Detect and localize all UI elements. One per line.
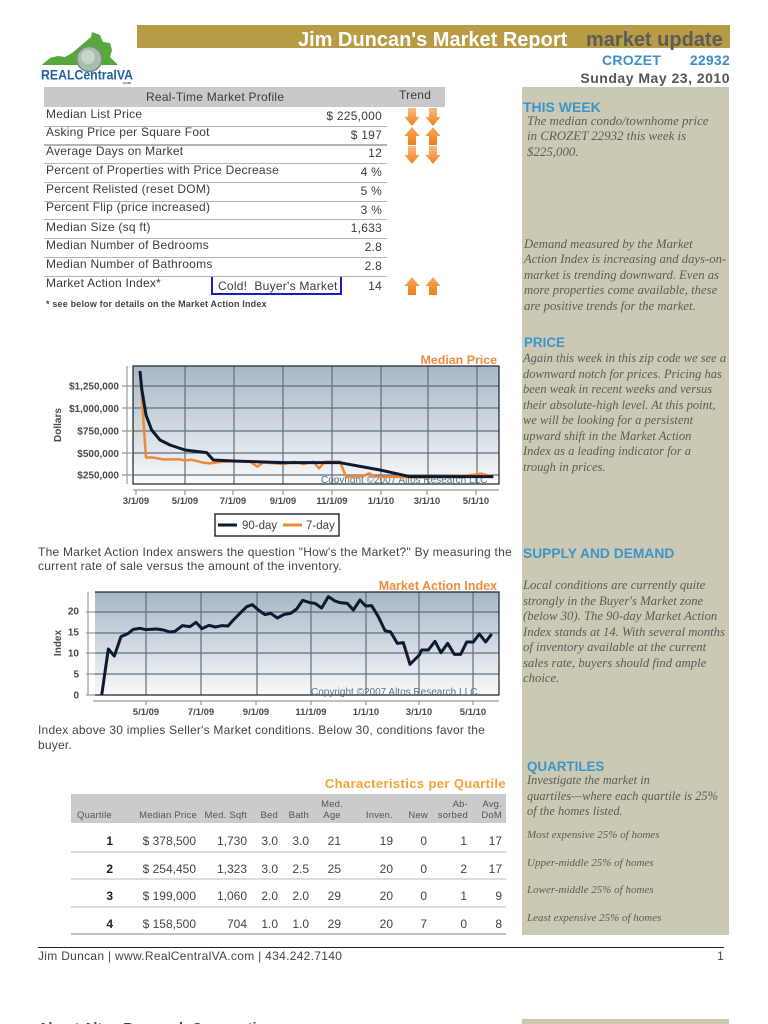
quartile row 1 bbox=[106, 834, 502, 848]
x axis: 3/1/10 bbox=[406, 707, 432, 718]
text: this week: in CROZET 22932 this week is bbox=[527, 129, 686, 143]
footer contact: Jim Duncan | www.RealCentralVA.com | 434.242.7140 bbox=[38, 949, 342, 963]
heading: characteristics per quartile: Characteristics per Quartile bbox=[325, 776, 506, 791]
text: price: upward shift in the Market Action bbox=[523, 429, 691, 443]
label: quartile 2: Upper-middle 25% of homes bbox=[527, 857, 654, 869]
quartile table header: Inven. bbox=[366, 810, 393, 821]
quartile row 2: 25 bbox=[328, 862, 341, 876]
text: price: been weak in recent weeks and versus bbox=[523, 382, 712, 396]
quartile row 1: 1 bbox=[106, 834, 113, 848]
chart title: Market Action Index bbox=[379, 579, 497, 593]
quartile row 1: 21 bbox=[328, 834, 341, 848]
quartile row 3: 0 bbox=[420, 889, 427, 903]
quartile row 4: 7 bbox=[420, 917, 427, 931]
quartile table header: DoM bbox=[481, 810, 502, 821]
text: supply and demand: sales rate, buyers should find ample bbox=[523, 656, 706, 670]
line: index bbox=[102, 597, 492, 695]
row: median list price: $ 225,000 bbox=[326, 109, 382, 123]
quartile row 4: 20 bbox=[380, 917, 393, 931]
status box: cold buyer's market: Cold! Buyer's Market bbox=[218, 279, 338, 293]
text: quartiles bbox=[527, 773, 718, 818]
quartile row 2: 3.0 bbox=[261, 862, 278, 876]
text: market action index intro bbox=[38, 545, 512, 573]
text: demand: are positive trends for the market. bbox=[524, 299, 696, 313]
y axis bbox=[53, 366, 133, 484]
text: quartiles: of the homes listed. bbox=[527, 804, 623, 818]
quartile row 3: 2.0 bbox=[261, 889, 278, 903]
row: median size: Median Size (sq ft) bbox=[46, 220, 151, 234]
quartile row 3: 29 bbox=[328, 889, 341, 903]
heading: supply and demand: SUPPLY AND DEMAND bbox=[523, 546, 674, 561]
row: days on market bbox=[46, 144, 382, 160]
x axis: 3/1/09 bbox=[123, 496, 149, 507]
text: supply and demand: (below 30). The 90-day Market Action bbox=[523, 609, 717, 623]
chart: market action index bbox=[53, 579, 500, 718]
arrows: days on market down bbox=[404, 146, 440, 164]
quartile row 2: 2 bbox=[460, 862, 467, 876]
row: bedrooms: Median Number of Bedrooms bbox=[46, 238, 209, 252]
quartile row 2: 17 bbox=[489, 862, 502, 876]
row: days on market: Average Days on Market bbox=[46, 144, 183, 158]
row: market action index: 14 bbox=[368, 279, 382, 293]
quartile row 4: 29 bbox=[328, 917, 341, 931]
logo: RealCentralVA: .com bbox=[122, 80, 132, 85]
quartile row 3: 1 bbox=[460, 889, 467, 903]
x axis: 5/1/10 bbox=[460, 707, 486, 718]
legend: 90-day bbox=[242, 520, 277, 532]
x axis: 7/1/09 bbox=[220, 496, 246, 507]
quartile row 3: 9 bbox=[495, 889, 502, 903]
x axis: 3/1/10 bbox=[414, 496, 440, 507]
quartile table header: Med. Sqft bbox=[205, 810, 247, 821]
y axis: Index bbox=[53, 630, 64, 656]
quartile row 4: 1.0 bbox=[292, 917, 309, 931]
y axis bbox=[53, 592, 95, 702]
text: index explanation bbox=[38, 723, 485, 752]
quartile row 3: $ 199,000 bbox=[143, 889, 196, 903]
quartile table header: Quartile bbox=[77, 810, 112, 821]
panel: quartile table bbox=[71, 794, 506, 935]
quartile row 1: 0 bbox=[420, 834, 427, 848]
text: price: we will be looking for a persistent bbox=[523, 413, 693, 427]
quartile row 2: 2 bbox=[106, 862, 113, 876]
quartile table header: New bbox=[408, 810, 428, 821]
text: index explanation: Index above 30 implies Seller's Market conditions. Below 30, conditions favor the bbox=[38, 723, 485, 737]
quartile row 4 bbox=[106, 917, 502, 931]
label: quartile 1: Most expensive 25% of homes bbox=[527, 829, 660, 841]
text: price bbox=[522, 351, 726, 474]
text: supply and demand bbox=[522, 578, 725, 685]
quartile table header: Bed bbox=[260, 810, 278, 821]
x axis bbox=[123, 490, 499, 507]
x axis bbox=[93, 701, 499, 718]
quartile row 1: 19 bbox=[380, 834, 393, 848]
row: relisted: Percent Relisted (reset DOM) bbox=[46, 182, 210, 196]
row: price decrease bbox=[46, 163, 382, 179]
quartile table header: sorbed bbox=[438, 810, 468, 821]
quartile row 1: 1 bbox=[460, 834, 467, 848]
chart title: Median Price bbox=[421, 353, 497, 367]
text: market action index intro: current rate of sale versus the amount of the inventory. bbox=[38, 559, 342, 573]
y axis: 0 bbox=[73, 690, 79, 702]
logo: RealCentralVA bbox=[41, 32, 133, 85]
y axis: $1,250,000 bbox=[69, 382, 119, 392]
title: Jim Duncan's Market Report bbox=[298, 29, 567, 51]
y axis: $750,000 bbox=[77, 426, 119, 438]
text: supply and demand: of inventory available at the current bbox=[523, 640, 706, 654]
quartile row 2: 0 bbox=[420, 862, 427, 876]
label: quartile 4: Least expensive 25% of homes bbox=[527, 912, 661, 924]
copyright note: Copyright ©2007 Altos Research LLC bbox=[321, 475, 487, 486]
panel: commentary sidebar bbox=[522, 87, 729, 935]
quartile row 4: $ 158,500 bbox=[143, 917, 196, 931]
row: median list price: Median List Price bbox=[46, 107, 142, 121]
text: price: trough in prices. bbox=[523, 460, 606, 474]
quartile row 3: 3 bbox=[106, 889, 113, 903]
x axis: 5/1/09 bbox=[172, 496, 198, 507]
row: flip: Percent Flip (price increased) bbox=[46, 200, 210, 214]
row: asking price: Asking Price per Square Foot bbox=[46, 125, 210, 139]
row: price decrease: Percent of Properties with Price Decrease bbox=[46, 163, 279, 177]
y axis: 20 bbox=[68, 606, 79, 618]
legend bbox=[215, 514, 339, 536]
x axis: 1/1/10 bbox=[353, 707, 379, 718]
heading: this week: THIS WEEK bbox=[523, 99, 601, 115]
text: supply and demand: Index stands at 14. With several months bbox=[523, 625, 725, 639]
quartile row 3 bbox=[106, 889, 502, 903]
quartile table header: Med. bbox=[321, 799, 343, 810]
row: flip: 3 % bbox=[361, 203, 382, 217]
x axis: 5/1/09 bbox=[133, 707, 159, 718]
next page sidebar bbox=[522, 1019, 729, 1024]
chart: median price bbox=[53, 353, 500, 537]
x axis: 11/1/09 bbox=[316, 496, 348, 507]
y axis: $1,000,000 bbox=[69, 404, 119, 415]
quartile row 2: $ 254,450 bbox=[143, 862, 196, 876]
y axis: 15 bbox=[68, 628, 79, 638]
quartile row 4: 704 bbox=[227, 917, 247, 931]
y axis: Dollars bbox=[53, 408, 64, 442]
quartile row 1: 3.0 bbox=[261, 834, 278, 848]
row: relisted: 5 % bbox=[361, 184, 382, 198]
quartile row 2: 2.5 bbox=[292, 862, 309, 876]
arrows: action index up bbox=[404, 277, 440, 295]
row: median size bbox=[46, 220, 382, 235]
table footnote: * see below for details on the Market Action Index bbox=[46, 299, 267, 309]
quartile row 4: 1.0 bbox=[261, 917, 278, 931]
text: demand: Action Index is increasing and days-on- bbox=[524, 252, 726, 266]
arrows: price per foot up bbox=[404, 127, 440, 145]
x axis: 5/1/10 bbox=[463, 496, 489, 507]
row: bathrooms bbox=[46, 257, 382, 273]
arrows: list price down bbox=[404, 108, 440, 126]
y axis: 10 bbox=[68, 648, 79, 660]
report date: Sunday May 23, 2010 bbox=[580, 70, 730, 86]
quartile row 1: 1,730 bbox=[217, 834, 247, 848]
text: this week: The median condo/townhome price bbox=[527, 114, 709, 128]
table header bbox=[44, 87, 445, 107]
row: asking price: $ 197 bbox=[351, 128, 382, 142]
text: demand: market is trending downward. Even as bbox=[524, 268, 719, 282]
location: Crozet 22932 bbox=[602, 52, 730, 68]
heading: quartiles: QUARTILES bbox=[527, 759, 604, 774]
quartile row 2 bbox=[106, 862, 502, 876]
x axis: 11/1/09 bbox=[295, 707, 327, 718]
y axis: $250,000 bbox=[77, 470, 119, 482]
quartile table header: Avg. bbox=[482, 799, 502, 810]
location: Crozet 22932: CROZET bbox=[602, 52, 661, 68]
line: 90-day bbox=[140, 371, 493, 477]
quartile row 3: 1,060 bbox=[217, 889, 247, 903]
y axis: $500,000 bbox=[77, 449, 119, 460]
copyright note: Copyright ©2007 Altos Research LLC bbox=[311, 687, 477, 698]
location: Crozet 22932: 22932 bbox=[690, 52, 730, 68]
x axis: 9/1/09 bbox=[243, 707, 269, 718]
text: quartiles: quartiles—where each quartile is 25% bbox=[527, 789, 718, 803]
text: quartiles: Investigate the market in bbox=[527, 773, 650, 787]
text: price: downward notch for prices. Pricing has bbox=[523, 367, 722, 381]
text: this week bbox=[527, 114, 709, 159]
text: demand bbox=[523, 236, 726, 313]
text: price: Again this week in this zip code we see a bbox=[523, 351, 726, 365]
text: supply and demand: choice. bbox=[523, 671, 559, 685]
x axis: 9/1/09 bbox=[270, 496, 296, 507]
x axis: 7/1/09 bbox=[188, 707, 214, 718]
row: market action index: Market Action Index* bbox=[46, 276, 161, 290]
page number: 1 bbox=[717, 949, 724, 963]
table header: Trend bbox=[399, 88, 431, 102]
quartile row 1: $ 378,500 bbox=[143, 834, 196, 848]
row: median size: 1,633 bbox=[351, 221, 382, 235]
quartile row 1: 3.0 bbox=[292, 834, 309, 848]
row: days on market: 12 bbox=[368, 146, 382, 160]
quartile table header: Age bbox=[323, 810, 341, 821]
row: bathrooms: Median Number of Bathrooms bbox=[46, 257, 213, 271]
text: price: their absolute-high level. At this point, bbox=[523, 398, 715, 412]
quartile row 4: 0 bbox=[460, 917, 467, 931]
plot area bbox=[133, 366, 499, 484]
subtitle: market update: market update bbox=[586, 29, 723, 51]
text: demand: more properties come available, these bbox=[524, 283, 717, 297]
title banner bbox=[137, 25, 730, 48]
x axis: 1/1/10 bbox=[368, 496, 394, 507]
y axis: 5 bbox=[73, 670, 79, 680]
row: market action index bbox=[46, 276, 382, 293]
quartile table header: Median Price bbox=[139, 810, 197, 821]
quartile row 2: 20 bbox=[380, 862, 393, 876]
quartile row 4: 4 bbox=[106, 917, 113, 931]
text: supply and demand: Local conditions are currently quite bbox=[523, 578, 705, 592]
row: bedrooms bbox=[46, 238, 382, 254]
quartile row 1: 17 bbox=[489, 834, 502, 848]
quartile row 3: 20 bbox=[380, 889, 393, 903]
text: this week: $225,000. bbox=[527, 145, 579, 159]
text: supply and demand: strongly in the Buyer's Market zone bbox=[523, 594, 703, 608]
row: flip bbox=[46, 200, 382, 217]
quartile table header: Bath bbox=[289, 810, 309, 821]
quartile row 3: 2.0 bbox=[292, 889, 309, 903]
table header: Real-Time Market Profile bbox=[146, 90, 284, 104]
footer bbox=[38, 947, 724, 964]
heading: price: PRICE bbox=[524, 335, 565, 350]
label: quartile 3: Lower-middle 25% of homes bbox=[527, 884, 654, 896]
panel: market profile table bbox=[44, 87, 445, 309]
quartile row 2: 1,323 bbox=[217, 862, 247, 876]
legend: 7-day bbox=[306, 520, 335, 532]
plot area bbox=[95, 592, 499, 695]
row: median list price bbox=[46, 107, 382, 123]
text: demand: Demand measured by the Market bbox=[524, 236, 693, 250]
row: price decrease: 4 % bbox=[361, 165, 382, 179]
row: relisted bbox=[46, 182, 382, 198]
row: bedrooms: 2.8 bbox=[365, 240, 382, 254]
text: market action index intro: The Market Action Index answers the question "How's the Market?" By measuring the bbox=[38, 545, 512, 559]
row: asking price bbox=[46, 125, 382, 142]
line: 7-day bbox=[140, 371, 493, 477]
quartile row 4: 8 bbox=[495, 917, 502, 931]
quartile table header bbox=[71, 794, 506, 823]
text: price: Index as a leading indicator for a bbox=[523, 444, 691, 458]
trend arrows bbox=[404, 108, 440, 295]
quartile table header: Ab- bbox=[453, 799, 468, 810]
row: bathrooms: 2.8 bbox=[365, 259, 382, 273]
text: index explanation: buyer. bbox=[38, 738, 72, 752]
